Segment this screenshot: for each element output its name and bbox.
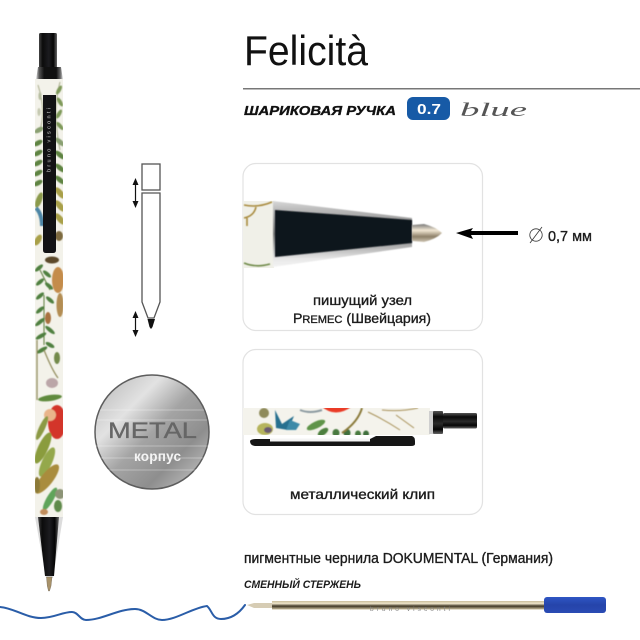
pen silver cone [35, 517, 63, 578]
body caption: корпус [134, 449, 181, 464]
ink description: пигментные чернила DOKUMENTAL (Германия) [244, 551, 553, 567]
refill label: СМЕННЫЙ СТЕРЖЕНЬ [244, 578, 361, 591]
panel: writing tip [243, 164, 592, 330]
panel frame [243, 350, 482, 514]
schematic tip [148, 319, 155, 329]
close-up: black grip [275, 210, 412, 257]
arrow: button travel [132, 178, 138, 208]
pen black tip cone [38, 517, 59, 576]
pen push button [39, 33, 57, 68]
panel frame [243, 164, 482, 330]
pen body with botanical print [35, 79, 63, 517]
arrow: tip travel [132, 311, 138, 337]
close-up: clip [250, 436, 415, 446]
pen clip: bruno visconti [46, 108, 52, 172]
close-up: silver cone [273, 201, 412, 267]
pen clip [43, 95, 56, 253]
pen writing tip [46, 577, 52, 591]
close-up: printed barrel [243, 201, 274, 268]
schematic push button [142, 164, 160, 190]
product type line [244, 97, 527, 121]
ink colour script word: blue [460, 100, 527, 121]
panel: metal clip [243, 350, 482, 514]
refill [247, 597, 606, 613]
ink scribble line [0, 605, 245, 620]
close-up: collar [429, 411, 443, 434]
tip size badge: 0.7 [417, 101, 441, 118]
tip diameter label: 0,7 мм [548, 228, 592, 245]
refill blue end cap [544, 597, 606, 613]
caption: metal clip: металлический клип [290, 486, 435, 502]
pen: full vertical view [35, 33, 63, 592]
header rule [243, 88, 640, 90]
METAL word: METAL [108, 418, 197, 443]
pointer arrow [456, 228, 518, 239]
diagram: pen retraction schematic [132, 164, 160, 337]
refill metal tube [272, 601, 545, 610]
subtitle: ШАРИКОВАЯ РУЧКА [244, 104, 396, 118]
caption: Premec origin: PREMEC (Швейцария) [293, 310, 431, 326]
brushed metal disc [95, 375, 209, 489]
close-up: metal tip [412, 224, 442, 242]
close-up: push button [443, 413, 477, 428]
refill point [247, 603, 272, 608]
close-up: printed barrel [243, 408, 430, 435]
tip diameter label [530, 227, 592, 245]
caption: writing unit: пишущий узел [313, 292, 412, 308]
metal body badge [95, 375, 209, 489]
pen collar [36, 67, 63, 80]
refill engraved brand: bruno visconti [370, 606, 450, 613]
schematic body [142, 193, 160, 318]
tip size badge [407, 97, 450, 120]
title: Felicità [244, 27, 369, 74]
